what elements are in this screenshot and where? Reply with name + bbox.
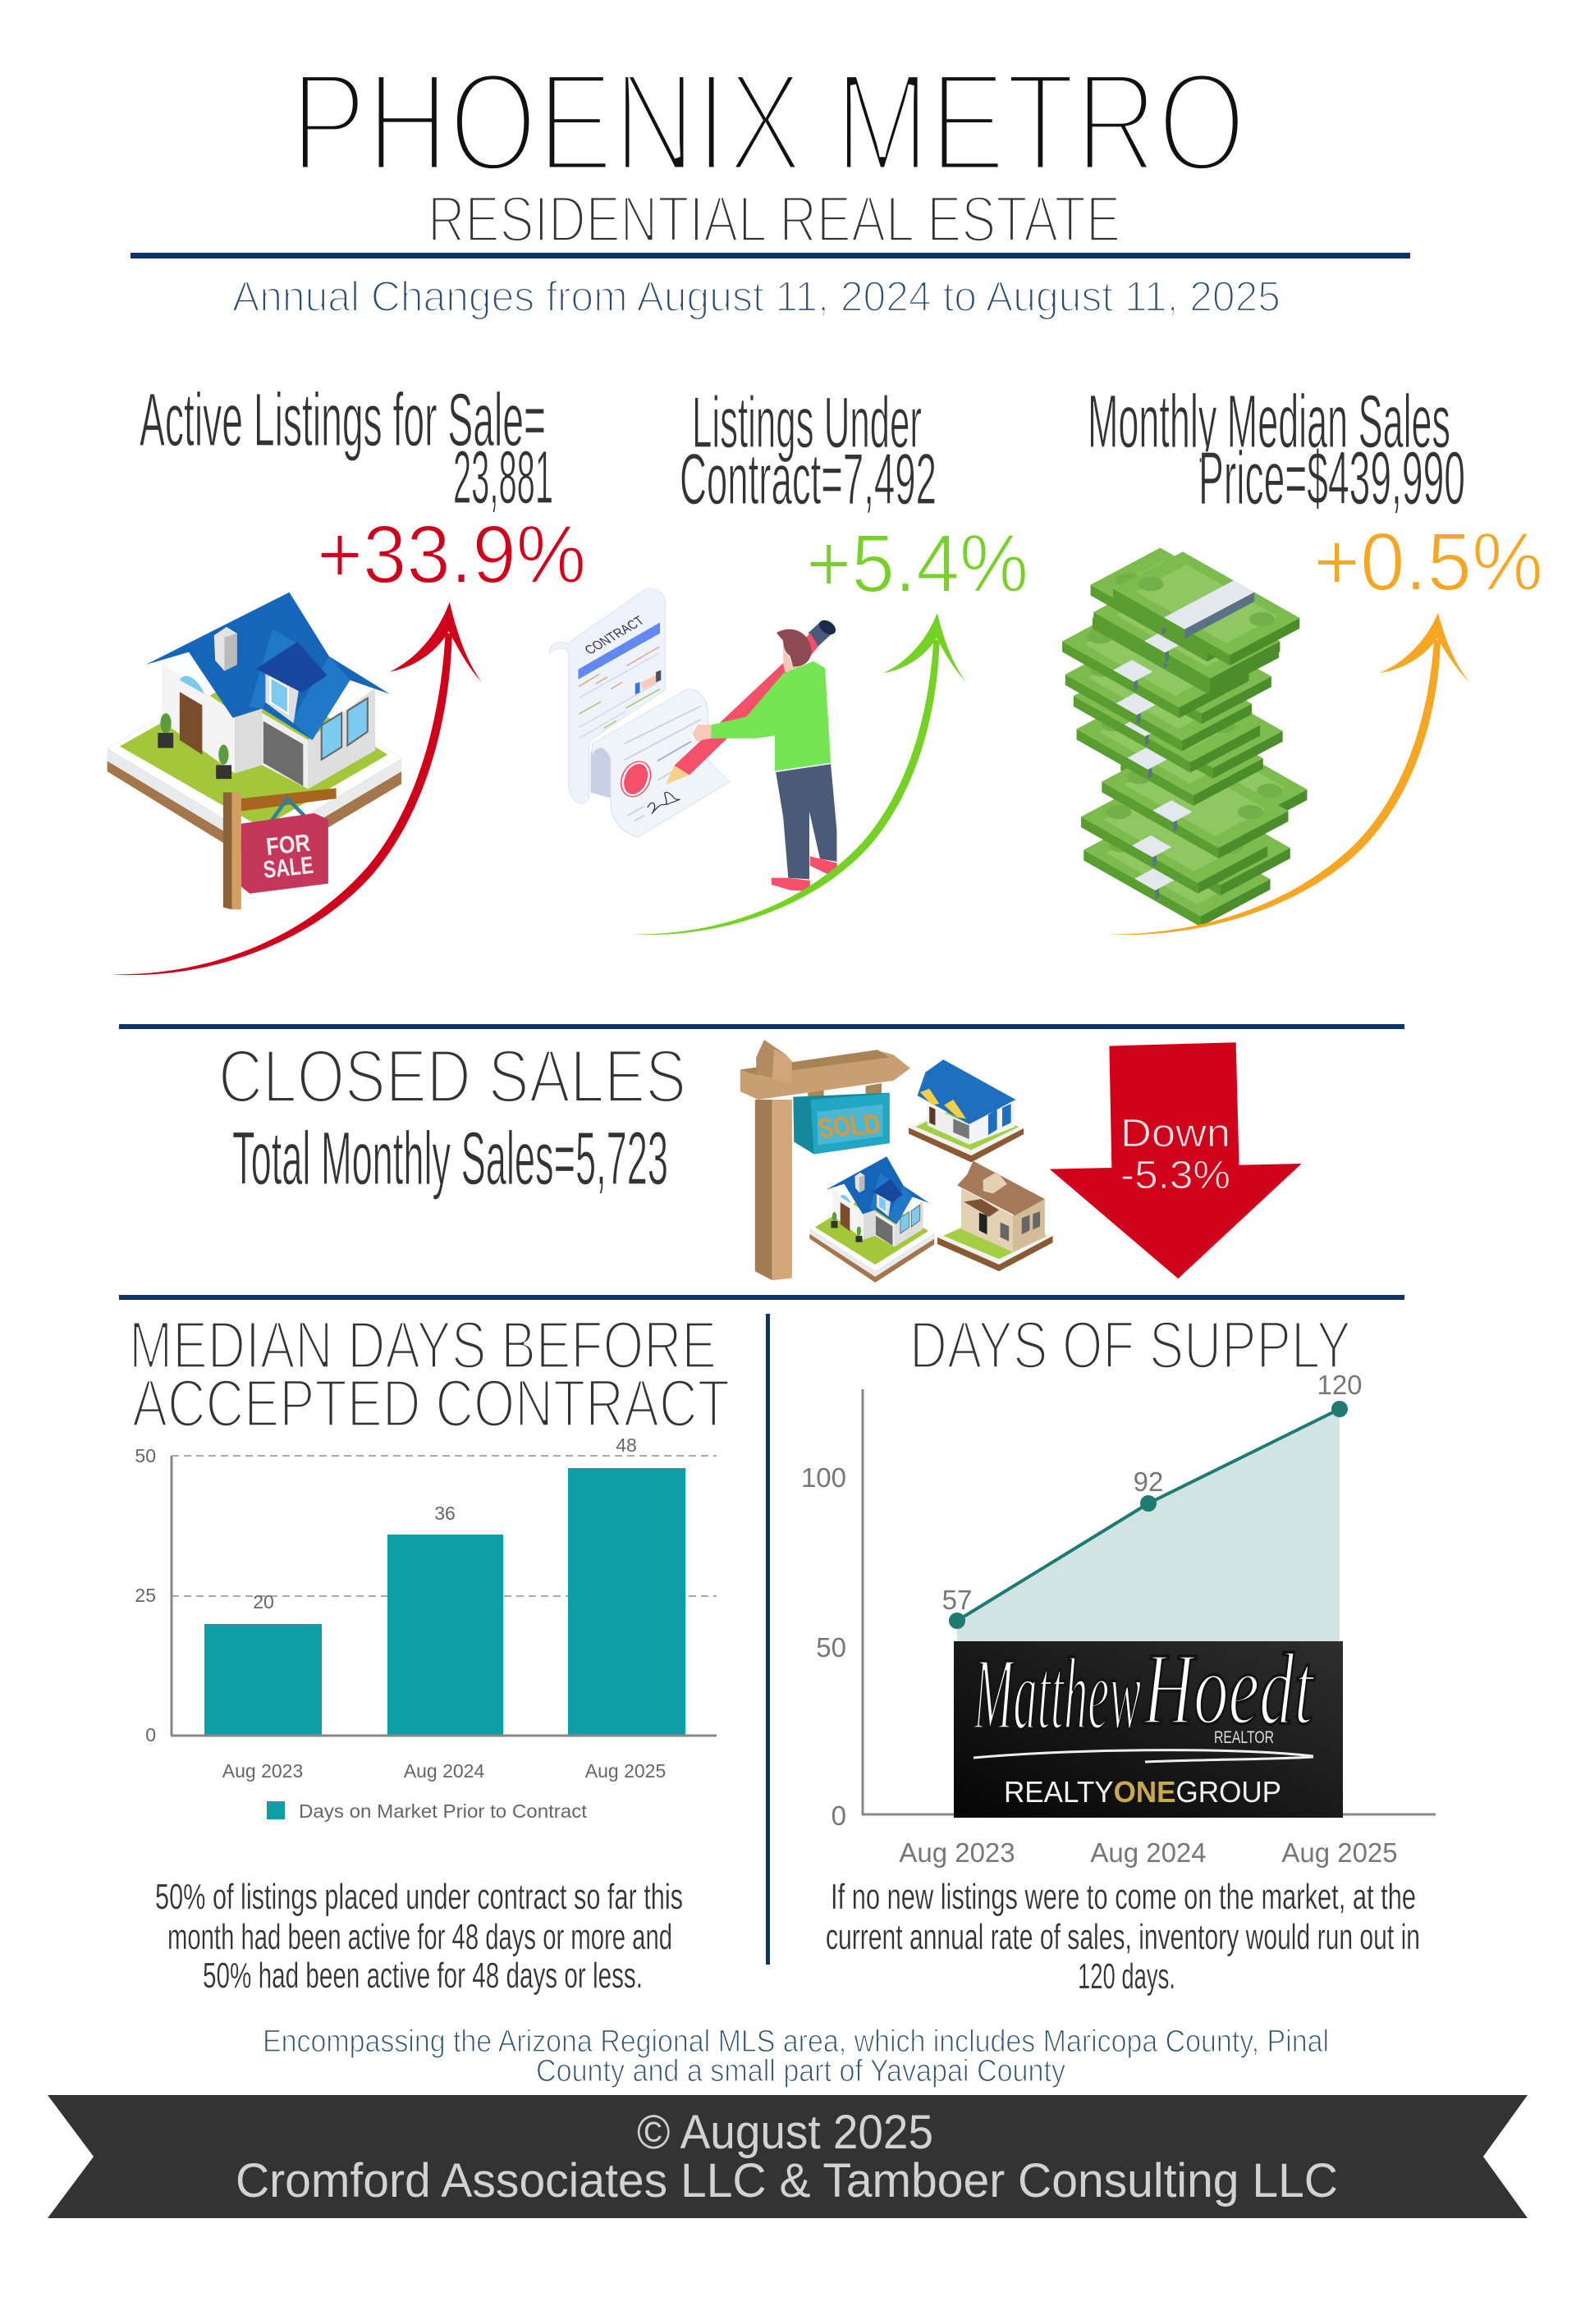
arrow: green growth [630,613,966,935]
icon: sold placard [793,1093,890,1154]
days of supply explanation [826,1877,1420,1997]
copyright date: © August 2025 [637,2106,933,2159]
under contract label: Listings Under [692,382,922,463]
area chart: 100 [801,1462,846,1493]
realtor logo: REALTOR [1214,1728,1274,1747]
coverage note [263,2024,1329,2088]
active listings label [140,378,553,519]
realtor logo: REALTYONEGROUP [1004,1775,1281,1809]
area chart: 57 [942,1585,972,1615]
down label: -5.3% [1120,1154,1230,1197]
arrow: red growth [109,602,482,975]
area chart [801,1370,1436,1868]
active listings change: +33.9% [317,509,586,601]
column divider [766,1314,770,1965]
icon: for sale sign [223,788,337,909]
legend: Days on Market Prior to Contract [299,1800,588,1822]
area chart: Aug 2024 [1090,1837,1207,1868]
panel: closed sales: Total Monthly Sales=5,723 [232,1117,668,1201]
panel: median sales price [1062,380,1543,935]
icon: sold post [740,1040,910,1280]
bar chart: 48 [616,1434,637,1456]
bar chart: 36 [434,1503,456,1524]
copyright owners: Cromford Associates LLC & Tamboer Consulting LLC [236,2154,1338,2207]
days of supply explanation: 120 days. [1078,1956,1175,1997]
median days explanation: 50% had been active for 48 days or less. [203,1956,643,1996]
under contract label: Contract=7,492 [680,438,937,519]
bar chart: Aug 2023 [222,1760,303,1782]
median days heading [129,1308,730,1441]
date range subheading: Annual Changes from August 11, 2024 to August 11, 2025 [232,273,1280,321]
icon: house for sale [108,592,401,867]
days of supply heading: DAYS OF SUPPLY [909,1308,1351,1383]
realtor logo [954,1633,1343,1818]
header rule [131,253,1410,258]
down label [1120,1112,1230,1197]
median days explanation: 50% of listings placed under contract so far this [155,1877,683,1917]
under contract label [680,382,937,519]
panel: listings under contract [549,382,1029,935]
coverage note: Encompassing the Arizona Regional MLS area, which includes Maricopa County, Pinal [263,2024,1329,2059]
median days heading: MEDIAN DAYS BEFORE [129,1308,717,1383]
down label: Down [1120,1112,1230,1155]
icon: person signing contract [549,588,839,891]
panel: active listings [108,378,586,975]
bar chart: 25 [135,1585,156,1606]
coverage note: County and a small part of Yavapai County [536,2054,1065,2088]
area chart: 120 [1317,1370,1363,1400]
closed sales heading: CLOSED SALES [218,1035,686,1119]
area chart: 50 [816,1632,846,1663]
median price label [1088,380,1465,520]
panel: active listings: 23,881 [453,436,553,519]
arrow: sales down with change [1050,1042,1302,1279]
icon: person signing contract: CONTRACT [582,613,648,657]
title: PHOENIX METRO [291,43,1246,201]
footer banner [48,2095,1528,2218]
realtor logo: Matthew [973,1638,1141,1751]
bar chart: Aug 2025 [585,1760,666,1782]
bar: Aug 2023 [204,1624,322,1735]
bar: Aug 2025 [568,1468,685,1735]
area chart: Aug 2023 [899,1837,1015,1868]
area chart: 0 [832,1800,846,1831]
section rule [119,1024,1404,1029]
realtor logo: Hoedt [1143,1633,1315,1746]
icon: small yellow-dormer house [909,1059,1024,1162]
bar chart: Aug 2024 [404,1760,484,1782]
panel: closed sales [218,1035,1302,1283]
icon: small blue house [809,1156,934,1283]
median days explanation: month had been active for 48 days or more and [167,1917,672,1957]
icon: sold sign and houses [740,1040,1024,1280]
bar: Aug 2024 [387,1535,503,1735]
icon: stack of cash [1062,548,1307,926]
icon: for sale sign: SALE [262,852,314,884]
active listings label: Active Listings for Sale= [140,378,546,462]
bar chart: 0 [145,1724,156,1745]
panel: median days [129,1308,730,1996]
icon: for sale sign: FOR [265,830,311,861]
subtitle: RESIDENTIAL REAL ESTATE [428,182,1120,255]
bar chart [135,1434,717,1822]
median price change: +0.5% [1313,516,1543,608]
arrow: orange growth [1105,613,1469,935]
icon: sold placard: SOLD [816,1109,882,1144]
icon: small brown house [937,1161,1053,1271]
median days explanation [155,1877,683,1996]
area chart: Aug 2025 [1281,1837,1398,1868]
under contract change: +5.4% [806,518,1029,610]
bar chart: 20 [253,1591,274,1613]
area chart: 92 [1134,1466,1163,1497]
median days heading: ACCEPTED CONTRACT [132,1366,730,1441]
bar chart: 50 [135,1445,156,1466]
panel: days of supply [801,1308,1436,1997]
section rule [119,1295,1404,1300]
